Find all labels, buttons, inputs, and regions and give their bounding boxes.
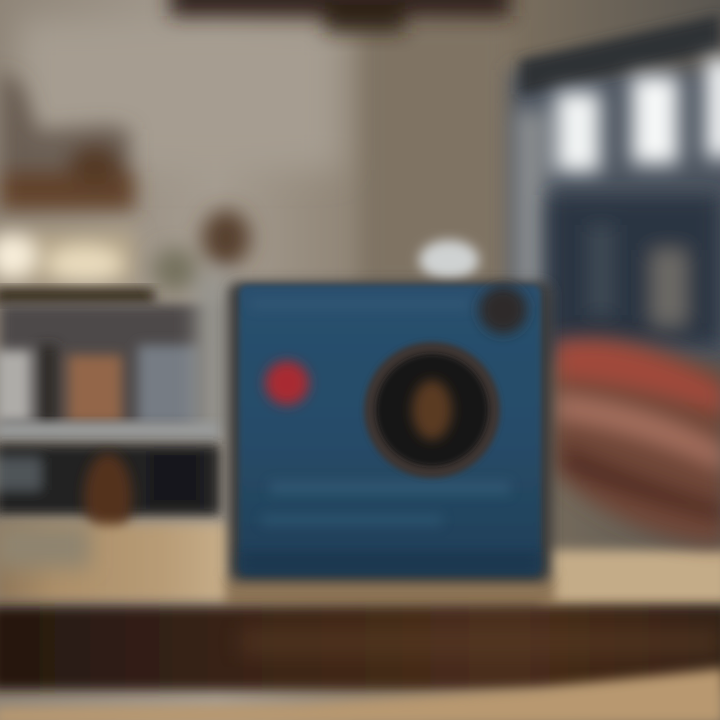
- lower shelf items: [0, 345, 202, 425]
- upper shelf decor: [0, 70, 135, 210]
- brown bottle: [84, 453, 132, 541]
- red button: [265, 361, 309, 405]
- shelf board: [0, 288, 155, 304]
- corner knob: [479, 286, 527, 334]
- white object behind camera: [419, 240, 479, 280]
- dark lower cabinet: [0, 444, 220, 516]
- vase and plant: [153, 210, 250, 435]
- lens: [364, 342, 500, 478]
- camera body: [239, 285, 541, 575]
- white counter strip: [0, 422, 220, 440]
- left shelves: [0, 70, 250, 541]
- body texture: [240, 300, 540, 574]
- window: [510, 15, 720, 360]
- camera shadow: [228, 282, 552, 582]
- glowing shelf lights: [0, 230, 135, 285]
- table surface: [0, 524, 720, 606]
- camera: [228, 282, 552, 582]
- ceiling beam: [170, 0, 510, 31]
- hand: [552, 337, 720, 545]
- buildings outside: [548, 195, 720, 345]
- light wood foreground: [0, 668, 720, 720]
- window panes: [515, 58, 720, 300]
- lower shelf back: [0, 304, 220, 429]
- dark wood table edge: [0, 606, 720, 690]
